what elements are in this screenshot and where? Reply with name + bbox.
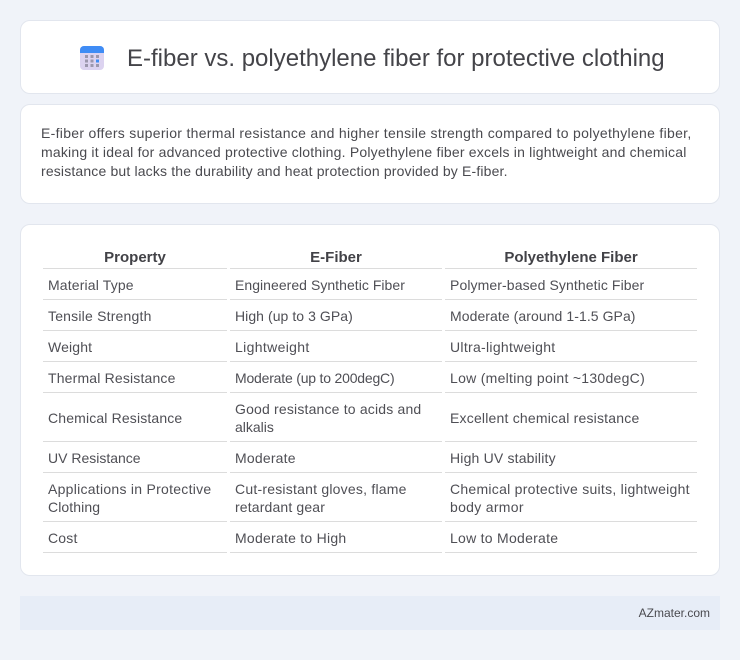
- comparison table: Moderate: [235, 450, 296, 466]
- comparison table: Moderate to High: [235, 530, 346, 546]
- comparison table: High UV stability: [450, 450, 556, 466]
- comparison table: Cost: [48, 530, 78, 546]
- footer bar: [20, 596, 720, 630]
- comparison table: Engineered Synthetic Fiber: [235, 277, 405, 293]
- comparison table: Excellent chemical resistance: [450, 410, 639, 426]
- comparison table: Ultra-lightweight: [450, 339, 555, 355]
- comparison table: Moderate (up to 200degC): [235, 370, 394, 386]
- comparison table: Applications in Protective: [48, 481, 211, 497]
- summary text: [41, 125, 692, 179]
- comparison table: High (up to 3 GPa): [235, 308, 353, 324]
- comparison table: Clothing: [48, 499, 100, 515]
- comparison table: Weight: [48, 339, 92, 355]
- table header: property: Property: [104, 249, 166, 266]
- comparison table: alkalis: [235, 419, 274, 435]
- footer text: AZmater.com: [639, 606, 710, 620]
- summary text: E-fiber offers superior thermal resistance and higher tensile strength compared to polyethylene fiber,: [41, 125, 692, 141]
- panel: title card: [20, 20, 720, 94]
- comparison table: Chemical Resistance: [48, 410, 182, 426]
- comparison table: Chemical protective suits, lightweight: [450, 481, 690, 497]
- panel: comparison table: [20, 224, 720, 576]
- comparison table: E-Fiber: [310, 249, 362, 266]
- panel: summary: [20, 104, 720, 204]
- icon: calendar: [80, 46, 104, 70]
- comparison table: Cut-resistant gloves, flame: [235, 481, 407, 497]
- comparison table: Thermal Resistance: [48, 370, 176, 386]
- comparison table: Good resistance to acids and: [235, 401, 421, 417]
- comparison table: Moderate (around 1-1.5 GPa): [450, 308, 636, 324]
- comparison table: [43, 249, 697, 553]
- comparison table: Polymer-based Synthetic Fiber: [450, 277, 644, 293]
- comparison table: body armor: [450, 499, 524, 515]
- summary text: resistance but lacks the durability and heat protection provided by E-fiber.: [41, 163, 508, 179]
- comparison table: Material Type: [48, 277, 134, 293]
- comparison table: Lightweight: [235, 339, 310, 355]
- comparison table: Tensile Strength: [48, 308, 152, 324]
- comparison table: Polyethylene Fiber: [504, 249, 638, 266]
- comparison table: UV Resistance: [48, 450, 141, 466]
- comparison table: retardant gear: [235, 499, 325, 515]
- title: E-fiber vs. polyethylene fiber for protective clothing: [127, 45, 665, 72]
- comparison table: Low to Moderate: [450, 530, 558, 546]
- comparison table: Low (melting point ~130degC): [450, 370, 645, 386]
- summary text: making it ideal for advanced protective clothing. Polyethylene fiber excels in lightweight and chemical: [41, 144, 687, 160]
